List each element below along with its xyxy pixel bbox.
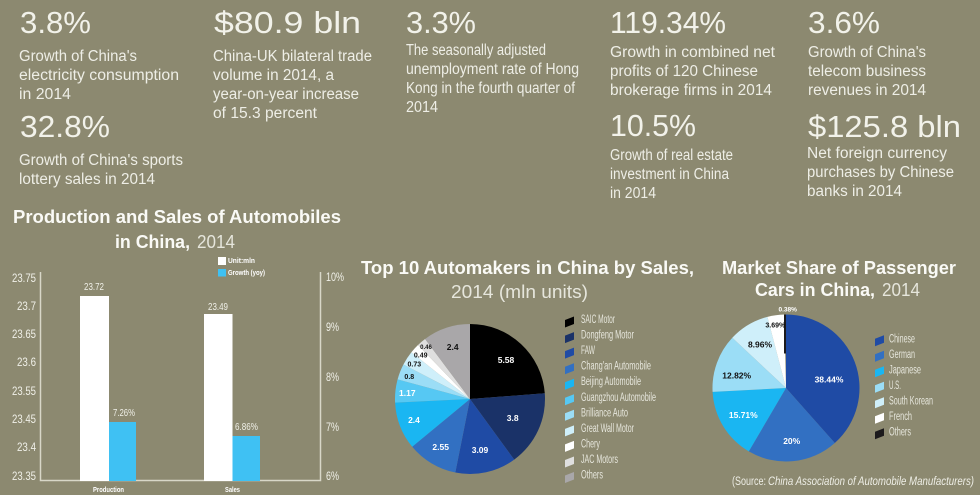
- pie value labels: 1.17: [399, 388, 416, 398]
- stat: telecom revenues: telecom business: [808, 63, 926, 80]
- stat: China-UK trade: [213, 5, 372, 122]
- stat: China-UK trade: China-UK bilateral trade: [213, 48, 372, 65]
- heading: top 10 automakers: [361, 258, 694, 302]
- legend: automakers: SAIC Motor: [581, 314, 615, 326]
- left axis labels: 23.65: [12, 329, 36, 341]
- pie value labels: 3.09: [472, 445, 489, 455]
- legend: Unit:mln: [228, 256, 255, 265]
- stat: real estate investment: [610, 108, 733, 202]
- pie value labels: 0.49: [414, 352, 428, 360]
- bar value labels: 6.86%: [235, 421, 258, 433]
- left axis labels: 23.7: [17, 301, 36, 313]
- pie value labels: 0.8: [404, 374, 414, 381]
- left axis labels: [12, 273, 37, 483]
- heading: production and sales: [13, 207, 341, 252]
- pie value labels: 2.4: [408, 415, 420, 425]
- left axis labels: 23.35: [12, 471, 36, 483]
- stat: Hong Kong unemployment: 3.3%: [406, 5, 476, 40]
- left axis labels: 23.45: [12, 414, 36, 426]
- category labels: Production: [93, 485, 124, 494]
- legend: [218, 256, 265, 277]
- heading: market share: [722, 258, 956, 300]
- pie value labels: 3.69%: [765, 322, 786, 330]
- stat: electricity consumption: Growth of China's: [19, 48, 137, 65]
- heading: top 10 automakers: Top 10 Automakers in China by Sales,: [361, 258, 694, 278]
- pie value labels: [722, 306, 844, 446]
- bar value labels: 7.26%: [113, 407, 135, 419]
- legend: automakers: [565, 314, 656, 483]
- heading: production and sales: Production and Sales of Automobiles: [13, 207, 341, 227]
- legend: market share: Chinese: [889, 334, 915, 346]
- bar value labels: 23.72: [84, 281, 104, 293]
- stat: real estate investment: Growth of real estate: [610, 147, 733, 164]
- stat: Hong Kong unemployment: 2014: [406, 99, 438, 116]
- stat: foreign currency purchases: banks in 2014: [807, 183, 902, 200]
- legend: market share: [875, 334, 933, 439]
- pie value labels: [399, 342, 519, 455]
- source note: (Source:: [732, 476, 766, 488]
- stat: Hong Kong unemployment: The seasonally adjusted: [406, 42, 546, 59]
- stat: brokerage profits: [610, 5, 776, 99]
- stat: brokerage profits: 119.34%: [610, 5, 726, 40]
- pie value labels: 2.55: [432, 442, 449, 452]
- legend: automakers: Beijing Automobile: [581, 376, 641, 388]
- left axis labels: 23.4: [17, 442, 37, 454]
- bar value labels: [84, 281, 258, 433]
- stat: foreign currency purchases: [807, 109, 961, 200]
- stat: sports lottery: [19, 109, 183, 188]
- legend: Growth (yoy): [228, 268, 265, 277]
- pie chart: automakers: [395, 324, 545, 474]
- bar: sales units: [204, 314, 232, 481]
- heading: market share: 2014: [882, 280, 920, 300]
- stat: China-UK trade: year-on-year increase: [213, 86, 359, 103]
- right axis labels: 10%: [326, 272, 344, 284]
- pie value labels: 0.38%: [778, 306, 797, 314]
- pie chart: market share: [712, 306, 860, 462]
- legend: market share: German: [889, 349, 915, 361]
- stat: sports lottery: Growth of China's sports: [19, 152, 183, 169]
- stat: telecom revenues: 3.6%: [808, 5, 880, 40]
- stat: China-UK trade: of 15.3 percent: [213, 105, 318, 122]
- bar value labels: 23.49: [208, 301, 228, 313]
- stat: brokerage profits: brokerage firms in 2014: [610, 82, 772, 99]
- heading: top 10 automakers: 2014 (mln units): [451, 282, 588, 302]
- stat: sports lottery: 32.8%: [20, 109, 110, 144]
- legend: automakers: Others: [581, 470, 603, 482]
- axes: [40, 272, 320, 480]
- stat: electricity consumption: 3.8%: [20, 5, 91, 40]
- legend: market share: Others: [889, 426, 911, 438]
- bar: production units: [80, 296, 109, 481]
- legend: market share: South Korean: [889, 396, 933, 408]
- right axis labels: 8%: [326, 372, 339, 384]
- heading: market share: Cars in China,: [755, 280, 875, 300]
- heading: market share: Market Share of Passenger: [722, 258, 956, 278]
- stat: real estate investment: 10.5%: [610, 108, 696, 143]
- left axis labels: 23.75: [12, 273, 36, 285]
- pie value labels: 8.96%: [748, 340, 772, 350]
- stat: telecom revenues: Growth of China's: [808, 44, 926, 61]
- pie value labels: 0.46: [420, 345, 432, 351]
- legend: automakers: FAW: [581, 345, 595, 357]
- legend: automakers: JAC Motors: [581, 454, 618, 466]
- legend: automakers: Chery: [581, 438, 600, 450]
- stat: China-UK trade: volume in 2014, a: [213, 67, 334, 84]
- legend: market share: U.S.: [889, 380, 901, 392]
- stat: real estate investment: investment in China: [610, 166, 729, 183]
- stat: foreign currency purchases: Net foreign currency: [807, 145, 947, 162]
- pie value labels: 0.73: [407, 362, 421, 368]
- legend: market share: Japanese: [889, 364, 921, 376]
- legend: automakers: Chang'an Automobile: [581, 361, 651, 373]
- pie value labels: 38.44%: [815, 374, 844, 384]
- stat: electricity consumption: [19, 5, 179, 103]
- legend: market share: French: [889, 411, 912, 423]
- stat: sports lottery: lottery sales in 2014: [19, 171, 155, 188]
- pie value labels: 15.71%: [729, 410, 758, 420]
- bar chart: production and sales: [12, 256, 344, 494]
- pie value labels: 3.8: [507, 413, 519, 423]
- legend: automakers: Brilliance Auto: [581, 407, 628, 419]
- legend: automakers: Great Wall Motor: [581, 423, 634, 435]
- heading: production and sales: in China,: [115, 232, 190, 252]
- stat: foreign currency purchases: purchases by Chinese: [807, 164, 954, 181]
- right axis labels: 7%: [326, 422, 339, 434]
- stat: electricity consumption: electricity consumption: [19, 67, 179, 84]
- stat: telecom revenues: [808, 5, 926, 99]
- pie value labels: 12.82%: [722, 370, 752, 380]
- stat: Hong Kong unemployment: [406, 5, 579, 116]
- stat: foreign currency purchases: $125.8 bln: [808, 109, 961, 144]
- stat: Hong Kong unemployment: unemployment rate of Hong: [406, 61, 579, 78]
- bar: sales growth: [232, 436, 260, 481]
- heading: production and sales: 2014: [197, 232, 235, 252]
- stat: telecom revenues: revenues in 2014: [808, 82, 926, 99]
- stat: China-UK trade: $80.9 bln: [214, 5, 361, 40]
- stat: brokerage profits: Growth in combined net: [610, 44, 776, 61]
- bar: production growth: [109, 422, 136, 481]
- right axis labels: 9%: [326, 322, 339, 334]
- stat: brokerage profits: profits of 120 Chinese: [610, 63, 758, 80]
- right axis labels: 6%: [326, 471, 339, 483]
- pie value labels: 20%: [783, 436, 801, 446]
- right axis labels: [326, 272, 344, 483]
- left axis labels: 23.6: [17, 357, 36, 369]
- left axis labels: 23.55: [12, 386, 36, 398]
- legend: automakers: Dongfeng Motor: [581, 330, 634, 342]
- category labels: Sales: [225, 485, 240, 494]
- pie value labels: 2.4: [447, 342, 459, 352]
- stat: real estate investment: in 2014: [610, 185, 656, 202]
- stat: Hong Kong unemployment: Kong in the fourth quarter of: [406, 80, 576, 97]
- stat: electricity consumption: in 2014: [19, 86, 71, 103]
- legend: automakers: Guangzhou Automobile: [581, 392, 656, 404]
- category labels: [93, 485, 240, 494]
- pie value labels: 5.58: [498, 355, 515, 365]
